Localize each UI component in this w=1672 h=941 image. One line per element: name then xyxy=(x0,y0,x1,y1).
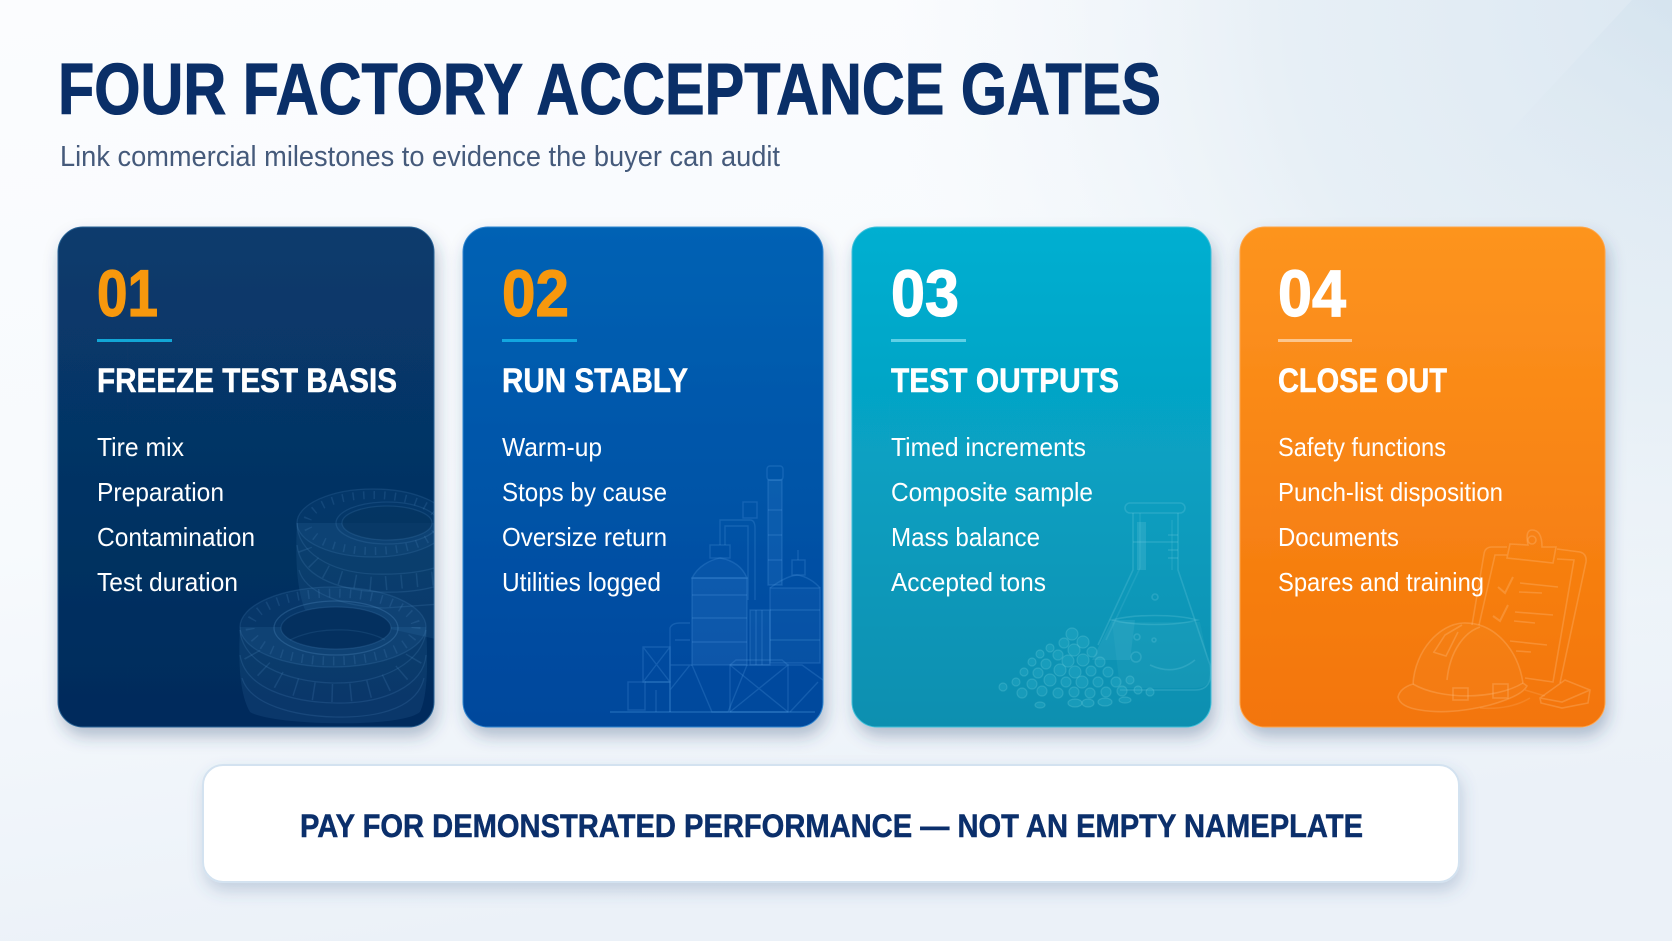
heading: FREEZE TEST BASIS xyxy=(97,362,397,400)
icon: flask and sample pile xyxy=(1092,503,1211,690)
list xyxy=(891,432,1093,597)
accent rule xyxy=(502,339,577,342)
list xyxy=(502,432,667,597)
list xyxy=(1278,432,1503,597)
heading: CLOSE OUT xyxy=(1278,362,1447,400)
list: Stops by cause xyxy=(502,477,667,507)
list: Accepted tons xyxy=(891,567,1046,597)
subtitle: Link commercial milestones to evidence the buyer can audit xyxy=(60,141,780,173)
list: Preparation xyxy=(97,477,224,507)
callout text: PAY FOR DEMONSTRATED PERFORMANCE — NOT AN EMPTY NAMEPLATE xyxy=(300,808,1363,844)
list: Spares and training xyxy=(1278,567,1484,597)
number 01: 01 xyxy=(97,256,158,330)
icon: stacked tires xyxy=(239,489,449,723)
heading: TEST OUTPUTS xyxy=(891,362,1119,400)
accent rule xyxy=(97,339,172,342)
list: Documents xyxy=(1278,522,1399,552)
list xyxy=(97,432,255,597)
title: FOUR FACTORY ACCEPTANCE GATES xyxy=(58,50,1161,130)
panel: gate 04 close out xyxy=(1240,227,1605,727)
panel: gate 02 run stably xyxy=(463,227,823,727)
icon: process plant xyxy=(610,466,823,712)
number 03: 03 xyxy=(891,256,959,330)
list: Timed increments xyxy=(891,432,1086,462)
list: Punch-list disposition xyxy=(1278,477,1503,507)
accent rule xyxy=(891,339,966,342)
panel: gate 01 freeze test basis xyxy=(58,227,449,727)
list: Oversize return xyxy=(502,522,667,552)
list: Mass balance xyxy=(891,522,1040,552)
list: Tire mix xyxy=(97,432,184,462)
list: Contamination xyxy=(97,522,255,552)
icon: clipboard and hard hat xyxy=(1398,530,1590,712)
list: Warm-up xyxy=(502,432,602,462)
heading: RUN STABLY xyxy=(502,362,688,400)
list: Safety functions xyxy=(1278,432,1446,462)
accent rule xyxy=(1278,339,1352,342)
panel: gate 03 test outputs xyxy=(852,227,1211,727)
list: Test duration xyxy=(97,567,238,597)
list: Composite sample xyxy=(891,477,1093,507)
list: Utilities logged xyxy=(502,567,661,597)
number 02: 02 xyxy=(502,256,569,330)
number 04: 04 xyxy=(1278,256,1346,330)
callout banner xyxy=(203,765,1459,882)
